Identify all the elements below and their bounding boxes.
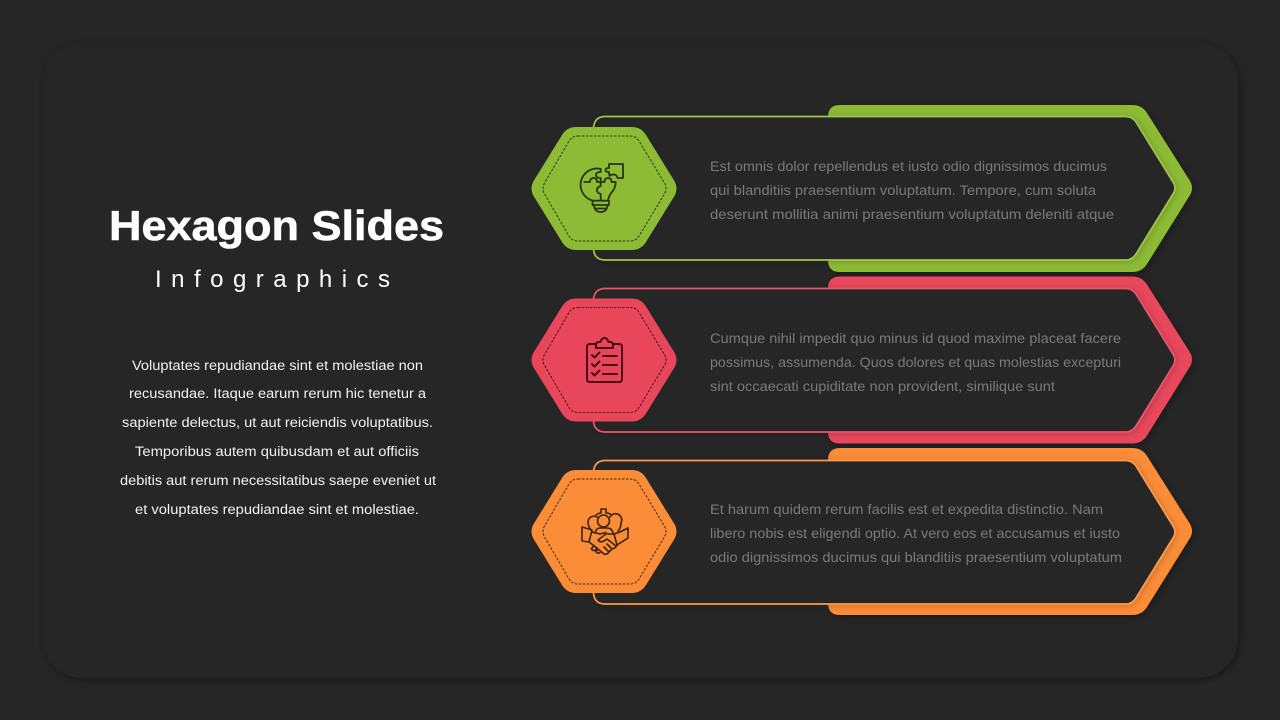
red description text: [710, 330, 1121, 394]
orange description text: [710, 501, 1122, 565]
icon: clipboard checklist: [587, 338, 622, 382]
left description text: et voluptates repudiandae sint et molestiae.: [135, 502, 419, 517]
red hexagon badge: [532, 298, 676, 422]
orange outlined body: [594, 460, 1175, 604]
green dashed hexagon: [543, 136, 666, 241]
orange back band: [828, 448, 1192, 615]
red description text: possimus, assumenda. Quos dolores et quas molestias excepturi: [710, 354, 1121, 370]
green description text: qui blanditiis praesentium voluptatum. Tempore, cum soluta: [710, 182, 1096, 198]
title: Hexagon Slides: [109, 202, 444, 249]
left description text: debitis aut rerum necessitatibus saepe eveniet ut: [120, 473, 436, 488]
row 2: red hexagon arrow: [532, 276, 1192, 444]
green outlined body: [594, 116, 1175, 260]
orange hexagon badge: [532, 470, 676, 593]
left description text: recusandae. Itaque earum rerum hic tenetur a: [129, 386, 427, 401]
green description text: Est omnis dolor repellendus et iusto odio dignissimos ducimus: [710, 158, 1107, 174]
orange description text: Et harum quidem rerum facilis est et expedita distinctio. Nam: [710, 501, 1103, 517]
green description text: deserunt mollitia animi praesentium voluptatum deleniti atque: [710, 206, 1114, 222]
left description text: Voluptates repudiandae sint et molestiae non: [132, 358, 423, 373]
orange description text: libero nobis est eligendi optio. At vero eos et accusamus et iusto: [710, 525, 1120, 541]
row 3: orange hexagon arrow: [532, 448, 1192, 615]
left description text: Temporibus autem quibusdam et aut officiis: [135, 444, 419, 459]
red dashed hexagon: [543, 308, 666, 412]
red description text: sint occaecati cupiditate non provident, similique sunt: [710, 378, 1055, 394]
subtitle: Infographics: [155, 266, 390, 293]
red outlined body: [594, 288, 1175, 432]
icon: handshake with people and gear: [582, 509, 628, 554]
row 1: green hexagon arrow: [532, 105, 1192, 272]
left description text: sapiente delectus, ut aut reiciendis voluptatibus.: [122, 415, 433, 430]
orange description text: odio dignissimos ducimus qui blanditiis praesentium voluptatum: [710, 549, 1122, 565]
red back band: [828, 276, 1192, 444]
red description text: Cumque nihil impedit quo minus id quod maxime placeat facere: [710, 330, 1121, 346]
orange dashed hexagon: [543, 479, 666, 584]
green back band: [828, 105, 1192, 272]
icon: puzzle light bulb: [581, 164, 623, 212]
green hexagon badge: [532, 127, 676, 250]
green description text: [710, 158, 1114, 222]
left description text: [120, 358, 436, 517]
